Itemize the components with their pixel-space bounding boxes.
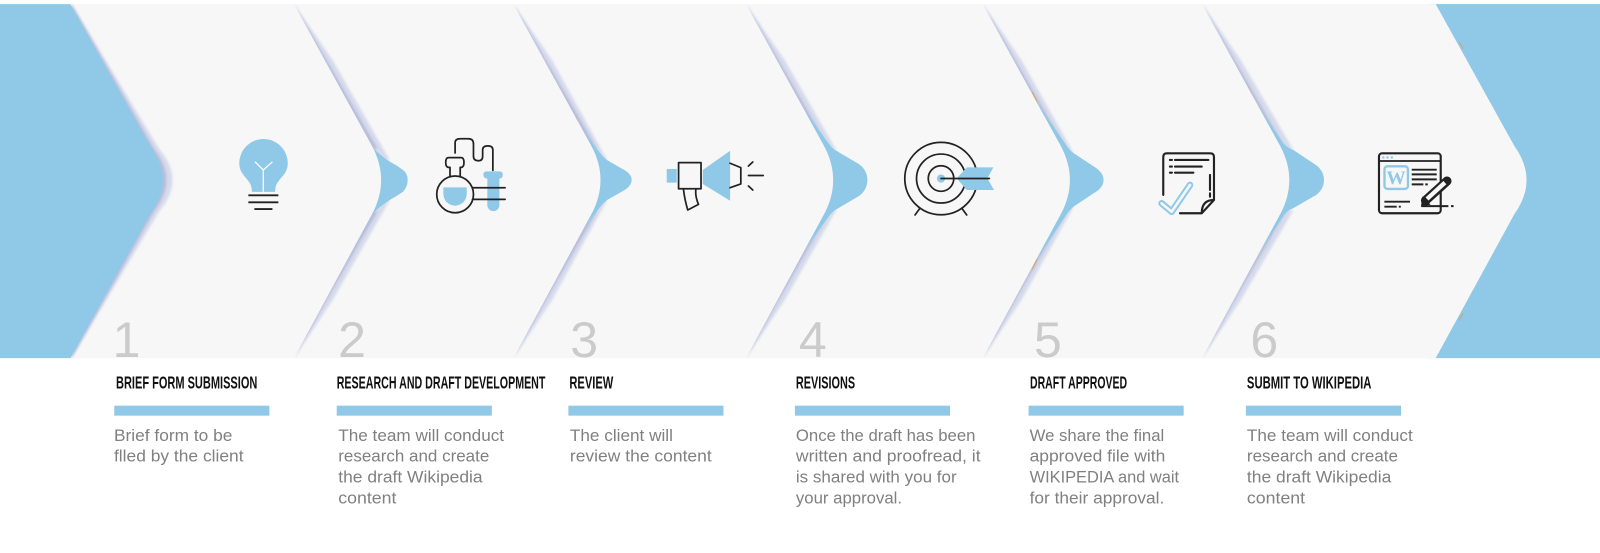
description: step 5: approved file with	[1030, 448, 1165, 466]
panel: left blue end block	[0, 4, 163, 358]
description: step 2: the draft Wikipedia	[338, 469, 484, 487]
description: step 2: The team will conduct	[338, 427, 505, 445]
accent bar: step 3	[568, 406, 723, 416]
icon: Wikipedia page editor	[1379, 153, 1454, 213]
description: step 2: research and create	[338, 448, 489, 466]
description: step 4: Once the draft has been	[796, 427, 976, 445]
heading: step 3: REVIEW	[569, 373, 614, 393]
step number 6: 6	[1250, 312, 1278, 368]
icon: light bulb	[239, 139, 288, 209]
step number 2: 2	[338, 312, 366, 368]
description: step 1: Brief form to be	[114, 427, 232, 445]
step 3 text block	[568, 312, 723, 466]
description: step 6: research and create	[1247, 448, 1398, 466]
description: step 3: The client will	[570, 427, 673, 445]
step 5 text block	[1029, 312, 1184, 508]
heading: step 4: REVISIONS	[796, 373, 855, 393]
description: step 6	[1247, 427, 1413, 508]
panel: right blue end block	[1429, 4, 1600, 358]
heading: step 2: RESEARCH AND DRAFT DEVELOPMENT	[337, 373, 546, 393]
accent bar: step 5	[1029, 406, 1184, 416]
description: step 1: flled by the client	[114, 448, 244, 466]
panel: step 2 chevron	[294, 4, 601, 358]
step number 3: 3	[570, 312, 598, 368]
description: step 4	[795, 427, 981, 508]
panel: step 1 chevron	[61, 4, 381, 358]
panel: step 3 chevron	[513, 4, 833, 358]
description: step 5	[1030, 427, 1180, 508]
description: step 4: your approval.	[796, 490, 902, 508]
accent bar: step 1	[114, 406, 269, 416]
description: step 3: review the content	[570, 448, 712, 466]
accent bar: step 6	[1246, 406, 1401, 416]
icon: approved document	[1162, 153, 1214, 213]
description: step 6: the draft Wikipedia	[1247, 469, 1392, 487]
panel: step 4 chevron	[746, 4, 1070, 358]
icon: Wikipedia page editor: W	[1386, 168, 1406, 189]
description: step 2: content	[338, 490, 397, 508]
heading: step 6: SUBMIT TO WIKIPEDIA	[1247, 373, 1372, 393]
panel: step 5 chevron	[983, 4, 1289, 358]
panel: step 6 chevron	[1202, 4, 1527, 358]
description: step 5: WIKIPEDIA and wait	[1030, 469, 1180, 487]
panel: step 3 blue connector	[551, 117, 632, 243]
step 6 text block	[1246, 312, 1413, 508]
description: step 4: is shared with you for	[796, 469, 957, 487]
description: step 3	[570, 427, 712, 466]
accent bar: step 2	[337, 406, 492, 416]
description: step 5: for their approval.	[1030, 490, 1164, 508]
icon: target with arrow	[905, 142, 994, 215]
step 1 text block	[113, 312, 269, 466]
panel: step 5 blue connector	[1010, 92, 1104, 269]
description: step 6: The team will conduct	[1247, 427, 1413, 445]
icon: flask and test tube	[437, 139, 505, 213]
step 4 text block	[795, 312, 981, 508]
panel: step 6 blue connector	[1230, 87, 1324, 273]
description: step 4: written and proofread, it	[795, 448, 981, 466]
description: step 6: content	[1247, 490, 1306, 508]
heading: step 1: BRIEF FORM SUBMISSION	[116, 373, 257, 393]
step number 1: 1	[113, 312, 140, 368]
accent bar: step 4	[795, 406, 950, 416]
step number 4: 4	[799, 312, 827, 368]
description: step 1	[114, 427, 244, 466]
description: step 2	[338, 427, 505, 508]
panel: step 4 blue connector	[770, 89, 867, 271]
icon: megaphone	[667, 151, 763, 210]
panel: step 2 blue connector	[337, 139, 408, 222]
step number 5: 5	[1034, 312, 1062, 368]
description: step 5: We share the final	[1030, 427, 1164, 445]
step 2 text block	[337, 312, 546, 508]
heading: step 5: DRAFT APPROVED	[1030, 373, 1127, 393]
